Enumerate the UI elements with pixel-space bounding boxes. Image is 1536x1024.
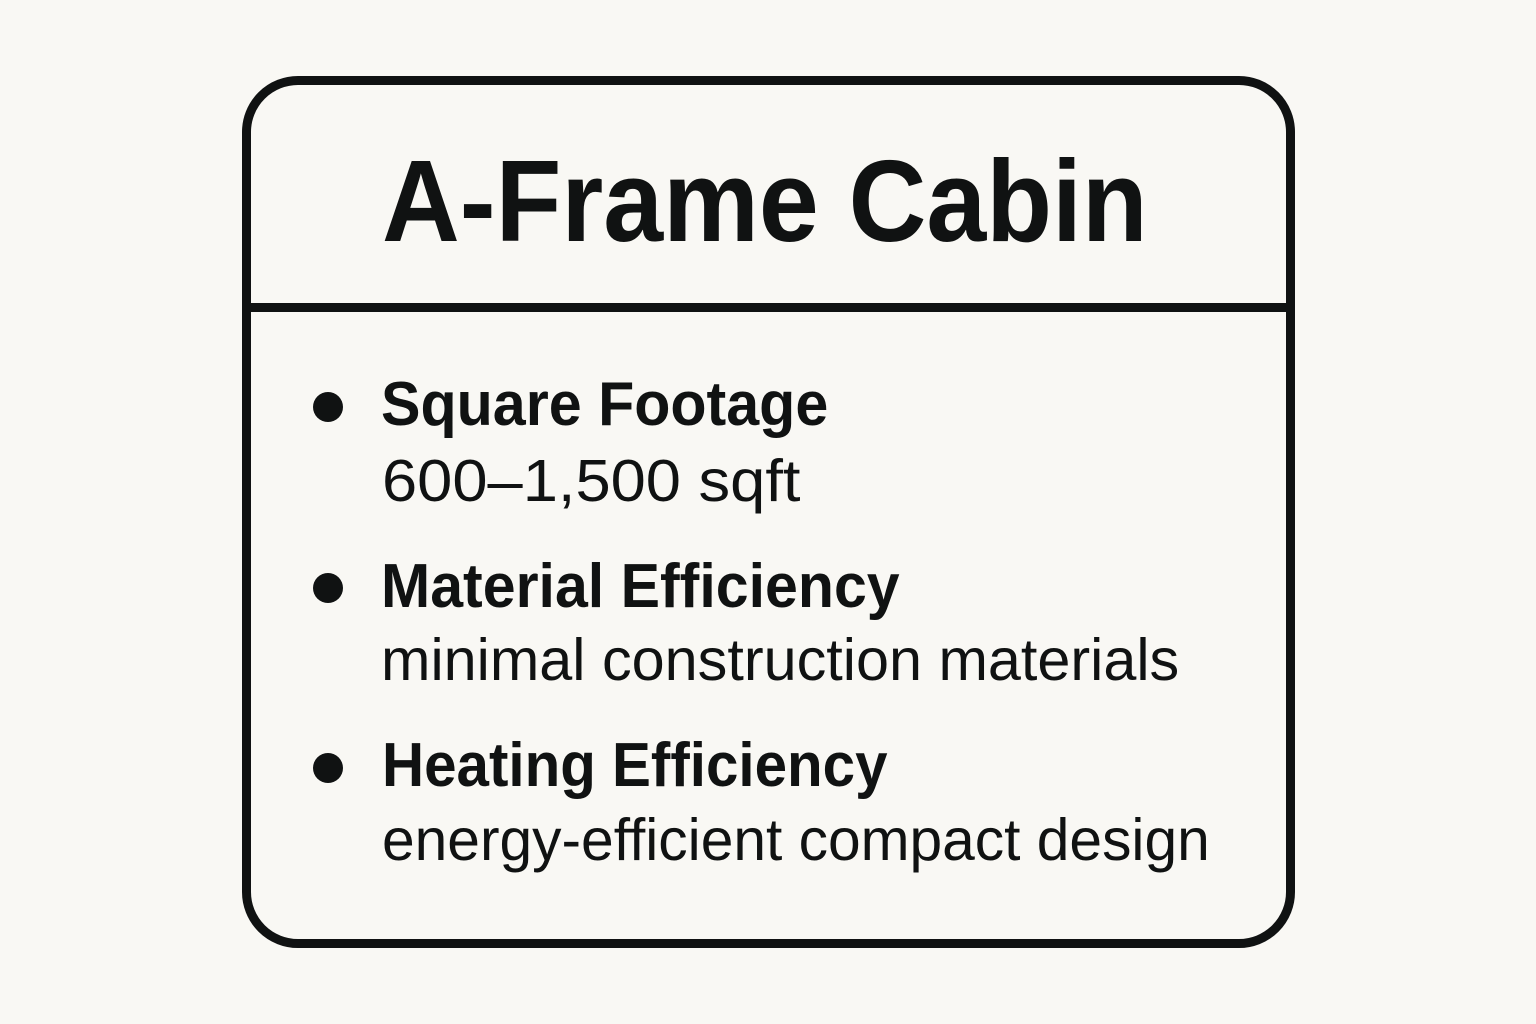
heading: square footage: Square Footage: [381, 369, 828, 439]
text: material efficiency value: minimal construction materials: [381, 627, 1179, 693]
text: heating efficiency value: energy-efficient compact design: [382, 807, 1210, 873]
heading: material efficiency: Material Efficiency: [381, 551, 900, 621]
text: square footage value: 600–1,500 sqft: [382, 448, 800, 514]
list item: heating efficiency: [313, 730, 1210, 873]
heading: heating efficiency: Heating Efficiency: [382, 730, 888, 800]
panel: card: [242, 76, 1295, 948]
bullet: material efficiency: [313, 573, 343, 603]
bullet: heating efficiency: [313, 753, 343, 783]
list item: square footage: [313, 369, 828, 514]
title: A-Frame Cabin: [382, 136, 1148, 266]
list item: material efficiency: [313, 551, 1179, 693]
bullet: square footage: [313, 392, 343, 422]
